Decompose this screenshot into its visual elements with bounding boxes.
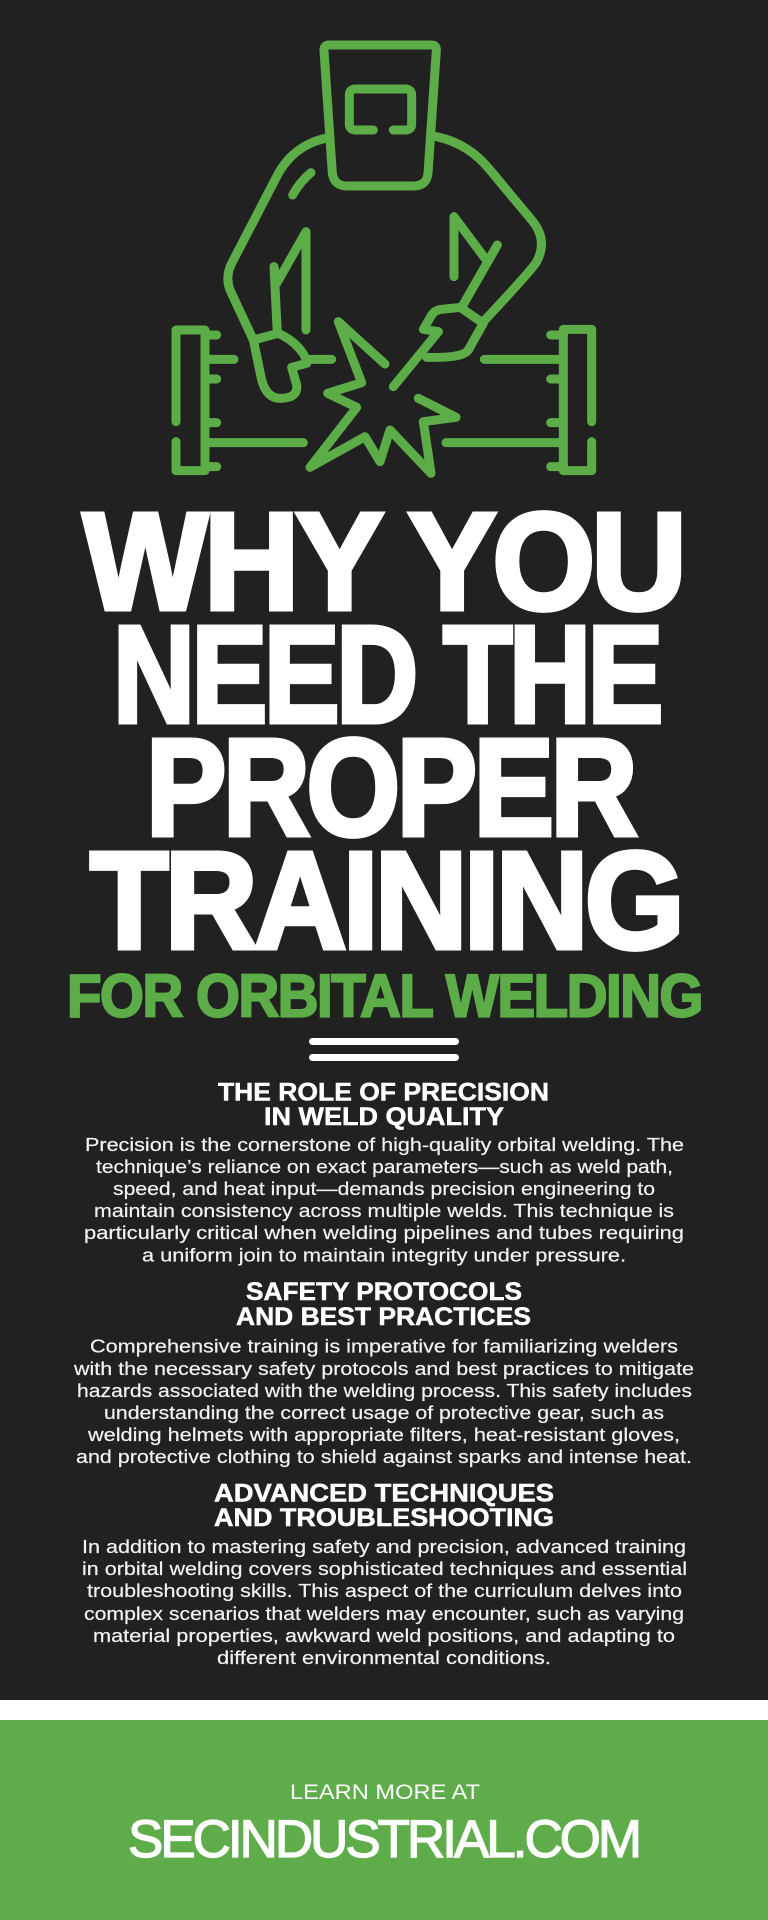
heading: SAFETY PROTOCOLS	[246, 1278, 522, 1306]
icon part: right arm outline	[437, 137, 541, 322]
heading: AND BEST PRACTICES	[236, 1303, 531, 1331]
body text	[73, 1336, 694, 1467]
icon part: right sleeve folds	[454, 217, 497, 307]
heading: AND TROUBLESHOOTING	[214, 1504, 554, 1532]
section: the role of precision	[84, 1078, 684, 1266]
heading	[214, 1480, 554, 1532]
icon part: sleeve crease	[293, 173, 311, 195]
body text: troubleshooting skills. This aspect of the curriculum delves into	[87, 1580, 682, 1601]
heading: ADVANCED TECHNIQUES	[214, 1480, 554, 1508]
title line 4: TRAINING	[90, 824, 681, 978]
body text: in orbital welding covers sophisticated techniques and essential	[82, 1558, 687, 1579]
icon part: spark burst	[310, 322, 456, 473]
body text: Comprehensive training is imperative for familiarizing welders	[90, 1336, 678, 1356]
heading	[236, 1278, 531, 1331]
website address: SECINDUSTRIAL.COM	[128, 1810, 639, 1869]
icon part: left arm and glove	[228, 138, 325, 398]
heading: THE ROLE OF PRECISION	[218, 1078, 549, 1106]
body text: material properties, awkward weld positions, and adapting to	[93, 1625, 675, 1646]
heading	[218, 1078, 549, 1131]
subtitle: FOR ORBITAL WELDING	[67, 962, 702, 1030]
panel: call to action banner	[0, 1720, 768, 1920]
title	[83, 485, 683, 978]
body text: a uniform join to maintain integrity under pressure.	[142, 1244, 626, 1266]
body text	[84, 1134, 684, 1266]
body text: complex scenarios that welders may encounter, such as varying	[84, 1603, 684, 1624]
icon part: welding helmet	[324, 45, 436, 186]
icon part: helmet visor	[349, 89, 412, 130]
title line 2: NEED THE	[113, 598, 660, 752]
icon part: left sleeve folds	[274, 232, 306, 333]
body text: and protective clothing to shield against sparks and intense heat.	[76, 1446, 692, 1467]
body text: technique’s reliance on exact parameters—such as weld path,	[96, 1156, 673, 1177]
body text: particularly critical when welding pipelines and tubes requiring	[84, 1222, 684, 1243]
body text: welding helmets with appropriate filters, heat-resistant gloves,	[87, 1424, 680, 1445]
body text: with the necessary safety protocols and best practices to mitigate	[73, 1358, 694, 1379]
icon: welder joining pipes	[176, 45, 592, 473]
title line 1: WHY YOU	[83, 485, 683, 639]
body text: speed, and heat input—demands precision engineering to	[113, 1178, 655, 1199]
section: advanced techniques	[82, 1480, 687, 1668]
title line 3: PROPER	[146, 711, 635, 865]
section: safety protocols	[73, 1278, 694, 1467]
icon part: right glove	[423, 307, 483, 357]
icon part: left pipe flange	[176, 330, 332, 471]
body text: understanding the correct usage of protective gear, such as	[104, 1402, 664, 1423]
learn more label: LEARN MORE AT	[290, 1781, 480, 1804]
body text: Precision is the cornerstone of high-quality orbital welding. The	[85, 1134, 684, 1155]
icon part: right pipe flange	[446, 329, 592, 471]
body text: hazards associated with the welding process. This safety includes	[77, 1380, 692, 1401]
body text	[82, 1536, 687, 1668]
icon part: welding rod	[393, 332, 438, 387]
body text: maintain consistency across multiple welds. This technique is	[94, 1200, 674, 1221]
body text: In addition to mastering safety and precision, advanced training	[82, 1536, 686, 1557]
heading: IN WELD QUALITY	[264, 1103, 504, 1131]
double rule divider	[309, 1038, 459, 1061]
white separator band	[0, 1700, 768, 1720]
body text: different environmental conditions.	[217, 1647, 551, 1668]
